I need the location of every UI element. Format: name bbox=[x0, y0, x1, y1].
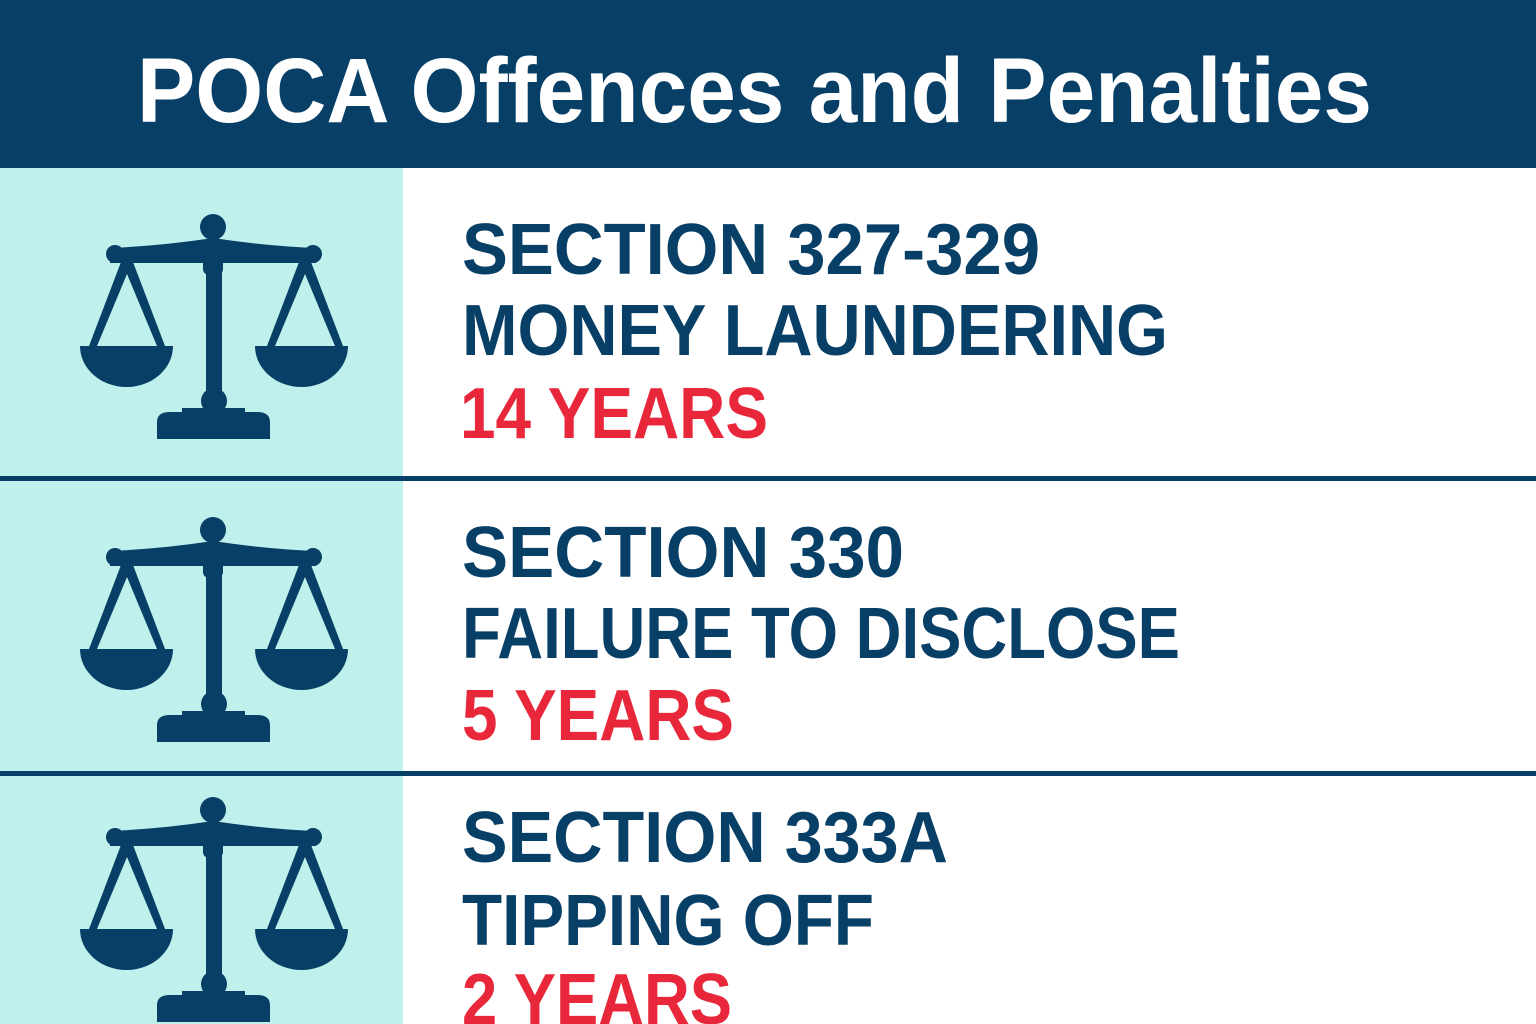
row 2 text: 5 YEARS bbox=[462, 676, 734, 756]
row 2 text: SECTION 330 bbox=[462, 513, 904, 593]
title: POCA Offences and Penalties bbox=[137, 40, 1372, 142]
row 3 text bbox=[462, 798, 948, 1024]
row 2 text bbox=[462, 513, 1180, 756]
header bar bbox=[0, 0, 1536, 168]
icon: scales row 1 bbox=[80, 214, 348, 439]
row 1 text: MONEY LAUNDERING bbox=[462, 291, 1168, 371]
row 1 text bbox=[460, 210, 1168, 454]
icon: scales row 2 bbox=[80, 517, 348, 742]
row 1 text: 14 YEARS bbox=[460, 374, 768, 454]
panel: icon column bbox=[0, 168, 403, 1024]
icon: scales row 3 bbox=[80, 797, 348, 1022]
row 3 text: SECTION 333A bbox=[462, 798, 948, 878]
row 3 text: TIPPING OFF bbox=[462, 881, 874, 961]
row 1 text: SECTION 327-329 bbox=[462, 210, 1040, 290]
row 2 text: FAILURE TO DISCLOSE bbox=[462, 594, 1180, 674]
